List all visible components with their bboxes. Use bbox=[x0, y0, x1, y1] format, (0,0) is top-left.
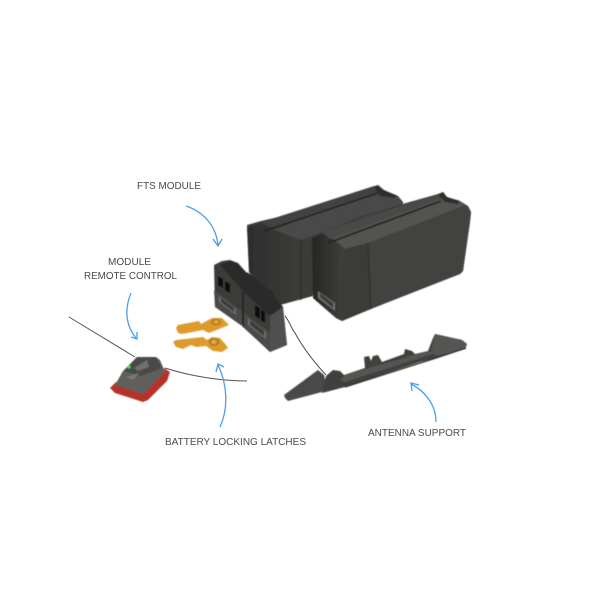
label plates bbox=[219, 296, 266, 339]
arrow: FTS module bbox=[186, 206, 222, 246]
connector sockets bbox=[218, 276, 265, 323]
red base bbox=[110, 368, 170, 402]
status light bbox=[127, 365, 131, 369]
label: module remote control bbox=[84, 257, 177, 282]
battery label plate bbox=[318, 291, 335, 311]
label: module remote control: MODULE bbox=[108, 257, 151, 268]
label: module remote control: REMOTE CONTROL bbox=[84, 271, 177, 282]
remote control cables bbox=[69, 317, 247, 381]
plate body bbox=[214, 260, 287, 352]
right side bbox=[270, 307, 287, 352]
upper latch bbox=[176, 318, 229, 334]
label: FTS module: FTS MODULE bbox=[137, 181, 201, 192]
arrow: antenna bbox=[411, 383, 436, 422]
label: antenna support: ANTENNA SUPPORT bbox=[368, 428, 466, 439]
battery: front module bbox=[312, 192, 471, 321]
rail top bbox=[340, 351, 436, 382]
battery: rear module bbox=[247, 185, 403, 305]
arrow: latches bbox=[216, 364, 226, 427]
left wedge bbox=[284, 370, 326, 401]
grey housing bbox=[115, 357, 165, 394]
label: battery locking latches: BATTERY LOCKING LATCHES bbox=[165, 437, 306, 448]
arrow: remote control bbox=[127, 293, 137, 339]
right lower face bbox=[244, 313, 270, 352]
left lower face bbox=[214, 290, 242, 326]
FTS module connector plates bbox=[214, 260, 287, 352]
ribbed top bbox=[220, 261, 282, 316]
right wedge bbox=[431, 334, 467, 356]
lower latch bbox=[173, 337, 228, 352]
latches bbox=[173, 318, 229, 352]
cable between plates and antenna bbox=[285, 316, 326, 375]
antenna support bbox=[284, 334, 467, 401]
rail and pegs bbox=[322, 334, 467, 393]
module remote control bbox=[110, 357, 170, 402]
